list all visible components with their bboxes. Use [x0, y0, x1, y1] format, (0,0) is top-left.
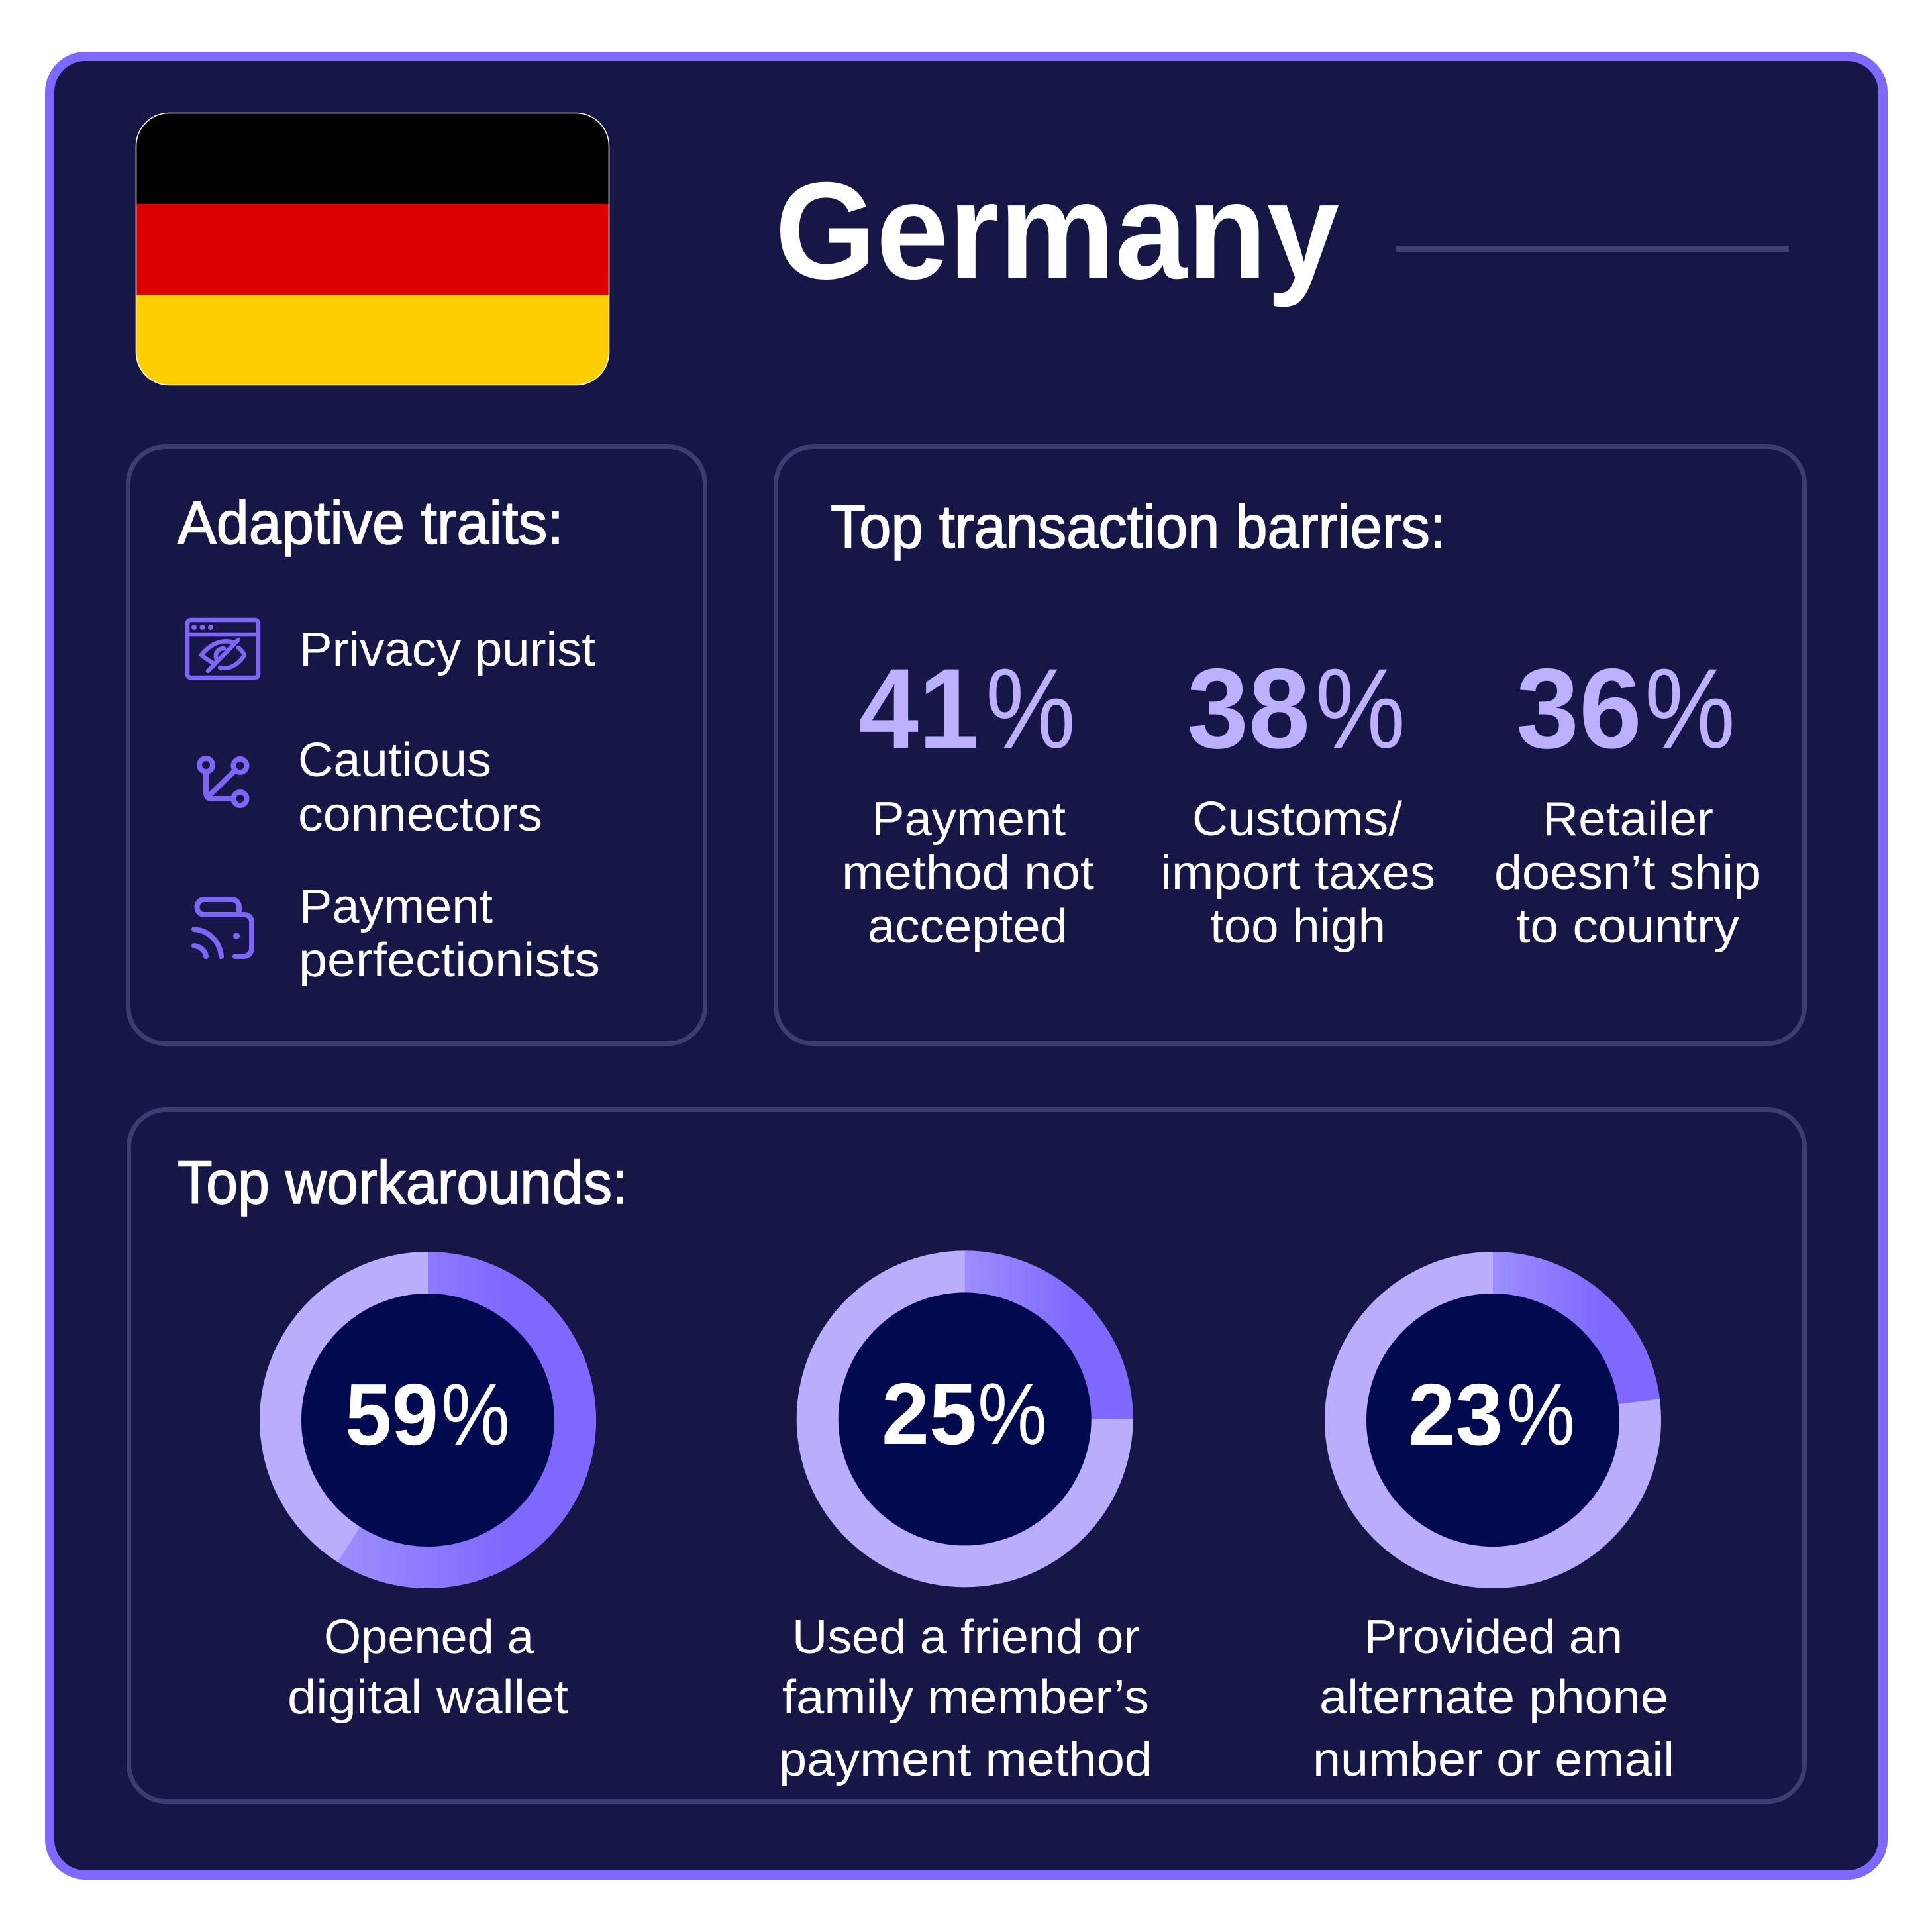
stat: 36% retailer doesn't ship to country: doesn’t ship: [1494, 846, 1761, 899]
label: used a friend or family member's payment method: Used a friend or: [792, 1611, 1140, 1664]
stat: 36% retailer doesn't ship to country: 36: [1516, 645, 1642, 772]
stat: 38% customs/import taxes too high: Customs/: [1192, 793, 1402, 846]
text: payment perfectionists: perfectionists: [299, 934, 600, 987]
stat: 36% retailer doesn't ship to country: %: [1645, 645, 1735, 772]
stat: 41% payment method not accepted: Payment: [872, 793, 1066, 846]
label: used a friend or family member's payment method: payment method: [779, 1733, 1152, 1786]
stat: 38% customs/import taxes too high: 38: [1187, 645, 1310, 772]
label: opened a digital wallet: Opened a: [324, 1611, 534, 1664]
stat: 41% payment method not accepted: 41: [858, 645, 979, 772]
heading: top transaction barriers: Top transaction barriers:: [831, 493, 1446, 561]
label: provided an alternate phone number or email: Provided an: [1364, 1611, 1623, 1664]
label: used a friend or family member's payment method: [779, 1611, 1152, 1786]
heading: adaptive traits: Adaptive traits:: [178, 489, 564, 557]
label: provided an alternate phone number or email: number or email: [1313, 1733, 1674, 1786]
stat: 41% payment method not accepted: %: [986, 645, 1076, 772]
text: payment perfectionists: Payment: [299, 880, 493, 933]
icon: contactless wallet: [194, 899, 252, 956]
panel: top transaction barriers: [776, 446, 1804, 1044]
flag of Germany: [136, 113, 609, 385]
stat: 36% retailer doesn't ship to country: [1494, 645, 1761, 953]
stat: 41% payment method not accepted: [842, 645, 1094, 953]
donut chart: 59%: %: [441, 1366, 510, 1463]
donut chart: 25%: %: [978, 1365, 1047, 1462]
title rule: [1396, 246, 1789, 252]
label: provided an alternate phone number or email: [1313, 1611, 1674, 1786]
label: opened a digital wallet: digital wallet: [287, 1671, 568, 1724]
text: payment perfectionists: [299, 880, 600, 987]
stat: 41% payment method not accepted: accepted: [868, 900, 1068, 953]
stat: 41% payment method not accepted: method not: [842, 846, 1094, 899]
icon: browser with crossed-out eye: [187, 620, 258, 678]
icon: branching connector nodes: [199, 758, 246, 805]
donut chart: 25%: [797, 1250, 1133, 1587]
stat: 38% customs/import taxes too high: import taxes: [1160, 846, 1435, 899]
donut chart: 59%: 59: [345, 1366, 438, 1463]
donut chart: 23%: [1325, 1252, 1661, 1588]
panel: adaptive traits: [128, 446, 705, 1044]
stat: 36% retailer doesn't ship to country: Retailer: [1543, 793, 1713, 846]
stat: 36% retailer doesn't ship to country: to country: [1516, 900, 1739, 953]
text: cautious connectors: connectors: [298, 788, 542, 841]
panel: top workarounds: [128, 1110, 1804, 1802]
text: cautious connectors: Cautious: [298, 734, 491, 787]
label: used a friend or family member's payment method: family member’s: [782, 1671, 1149, 1724]
heading: top workarounds: Top workarounds:: [178, 1149, 628, 1217]
label: opened a digital wallet: [287, 1611, 568, 1724]
donut chart: 59%: [260, 1252, 596, 1588]
text: cautious connectors: [298, 734, 542, 841]
stat: 38% customs/import taxes too high: [1160, 645, 1435, 953]
label: provided an alternate phone number or email: alternate phone: [1319, 1671, 1668, 1724]
donut chart: 25%: 25: [882, 1365, 977, 1462]
text: privacy purist: Privacy purist: [299, 623, 595, 676]
stat: 38% customs/import taxes too high: %: [1315, 645, 1405, 772]
donut chart: 23%: 23: [1408, 1366, 1503, 1463]
stat: 38% customs/import taxes too high: too high: [1210, 900, 1386, 953]
title: Germany: [775, 154, 1339, 308]
donut chart: 23%: %: [1507, 1366, 1575, 1463]
